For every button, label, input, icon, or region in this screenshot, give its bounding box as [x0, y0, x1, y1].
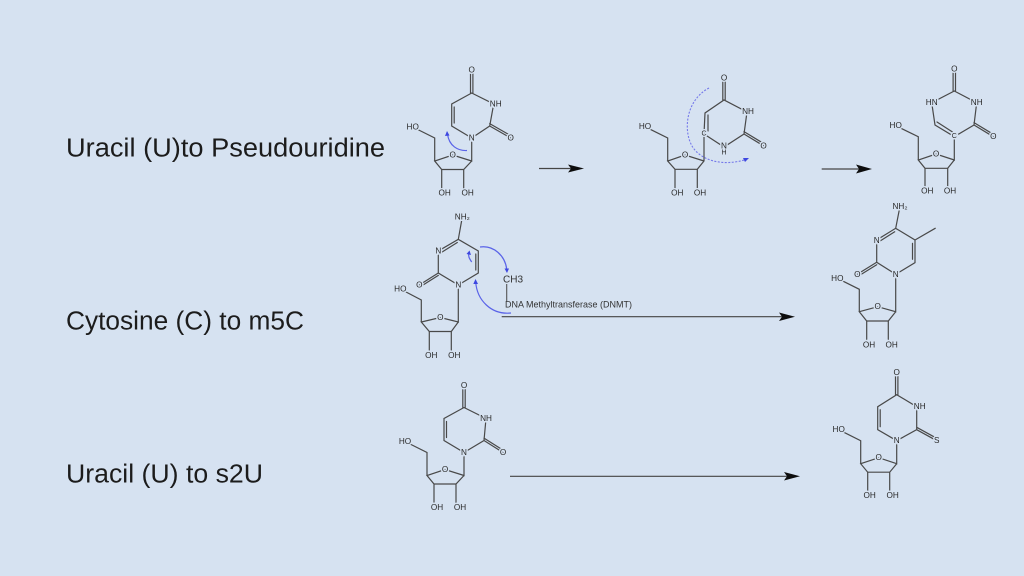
molecule: s2U, row 3: OH: [864, 491, 876, 500]
molecule: s2U, row 3: NH: [914, 402, 926, 411]
molecule: pseudouridine, row 1: OH: [944, 186, 956, 196]
molecule: m5C, row 2: OH: [886, 340, 898, 349]
molecule: m5C, row 2: O: [875, 302, 881, 311]
molecule: cytidine, row 2: N: [435, 246, 441, 256]
molecule: cytidine, row 2: O: [437, 313, 443, 322]
icon: blue curved arrows, row 2: [466, 247, 511, 313]
molecule: s2U, row 3: S: [934, 436, 940, 445]
molecule: intermediate, row 1: OH: [671, 188, 684, 198]
molecule: cytidine, row 2: OH: [425, 351, 438, 360]
molecule: intermediate, row 1: O: [721, 74, 727, 82]
molecule: s2U, row 3: HO: [833, 425, 845, 434]
molecule: intermediate, row 1: NH: [742, 107, 754, 116]
molecule: intermediate, row 1: H: [721, 150, 727, 156]
molecule: uridine, row 1: O: [450, 150, 456, 160]
molecule: intermediate, row 1: OH: [694, 188, 706, 198]
label: Cytosine to m5C: Cytosine (C) to m5C: [66, 308, 304, 336]
molecule: uridine, row 3: O: [500, 448, 506, 457]
arrow: uridine to s2U: [510, 472, 800, 480]
icon: blue curved arrow, row 1: [445, 131, 467, 151]
molecule: cytidine, row 2: N: [455, 280, 461, 290]
molecule: m5C, row 2: OH: [863, 340, 875, 349]
molecule: cytidine, row 2: HO: [394, 284, 406, 294]
molecule: cytidine, row 2: [394, 212, 478, 360]
molecule: uridine, row 1: N: [469, 134, 475, 142]
methyl group label and bond: CH3: [503, 274, 523, 286]
molecule: s2U, row 3: O: [894, 368, 900, 377]
molecule: pseudouridine, row 1: OH: [921, 186, 934, 196]
molecule: pseudouridine, row 1: NH: [971, 98, 983, 107]
molecule: uridine, row 1: [407, 66, 514, 198]
molecule: m5C, row 2: [831, 202, 935, 350]
molecule: uridine, row 3: N: [461, 448, 467, 457]
molecule: s2U, row 3: [833, 368, 940, 500]
molecule: uridine, row 1: OH: [439, 188, 451, 198]
label: Uracil to s2U: Uracil (U) to s2U: [66, 460, 263, 488]
molecule: intermediate, row 1: HO: [639, 122, 651, 131]
molecule: intermediate, row 1: N: [721, 142, 727, 150]
molecule: pseudouridine, row 1: O: [951, 64, 957, 74]
arrow: uridine to intermediate: [539, 164, 584, 172]
molecule: pseudouridine, row 1: HN: [926, 98, 938, 107]
molecule: uridine, row 1: HO: [407, 122, 419, 132]
molecule: pseudouridine, row 1: [890, 64, 996, 196]
molecule: uridine, row 3: OH: [454, 503, 466, 512]
enzyme label: DNA Methyltransferase: DNA Methyltransferase (DNMT): [505, 300, 632, 310]
label: Uracil to Pseudouridine: Uracil (U)to Pseudouridine: [66, 134, 385, 162]
molecule: uridine, row 1: OH: [462, 188, 474, 198]
icon: dashed blue arc, row 1: [687, 88, 749, 163]
molecule: uridine, row 1: O: [508, 134, 514, 142]
molecule: uridine, row 1: NH: [490, 100, 502, 108]
molecule: cytidine, row 2: O: [416, 280, 422, 290]
molecule: m5C, row 2: O: [854, 270, 860, 279]
methyl group label and bond: [503, 274, 523, 301]
arrow: cytidine to m5C: [502, 312, 795, 321]
molecule: pseudouridine, row 1: O: [990, 132, 996, 141]
molecule: pseudouridine, row 1: HO: [890, 121, 902, 130]
molecule: intermediate, row 1: C: [701, 130, 707, 138]
molecule: m5C, row 2: N: [874, 236, 880, 245]
molecule: m5C, row 2: HO: [831, 274, 843, 283]
molecule: uridine, row 3: HO: [399, 437, 411, 446]
molecule: uridine, row 3: O: [461, 381, 467, 390]
arrow: intermediate to pseudouridine: [822, 164, 872, 174]
molecule: uridine, row 3: O: [442, 465, 448, 474]
molecule: m5C, row 2: NH₂: [892, 202, 908, 211]
molecule: intermediate, row 1: O: [760, 142, 767, 150]
molecule: s2U, row 3: N: [894, 436, 900, 445]
molecule: uridine, row 3: [399, 381, 506, 512]
molecule: intermediate, row 1: O: [682, 150, 688, 160]
molecule: cytidine, row 2: NH₂: [455, 212, 470, 222]
molecule: uridine, row 3: NH: [480, 414, 492, 423]
molecule: pseudouridine, row 1: O: [933, 150, 939, 158]
molecule: s2U, row 3: OH: [887, 491, 899, 500]
molecule: m5C, row 2: N: [893, 270, 899, 279]
molecule: uridine, row 1: O: [469, 66, 475, 74]
molecule: intermediate, row 1: [639, 74, 767, 198]
molecule: cytidine, row 2: OH: [448, 351, 461, 360]
molecule: uridine, row 3: OH: [431, 503, 443, 512]
molecule: pseudouridine, row 1: C: [952, 133, 957, 140]
molecule: s2U, row 3: O: [876, 453, 882, 462]
